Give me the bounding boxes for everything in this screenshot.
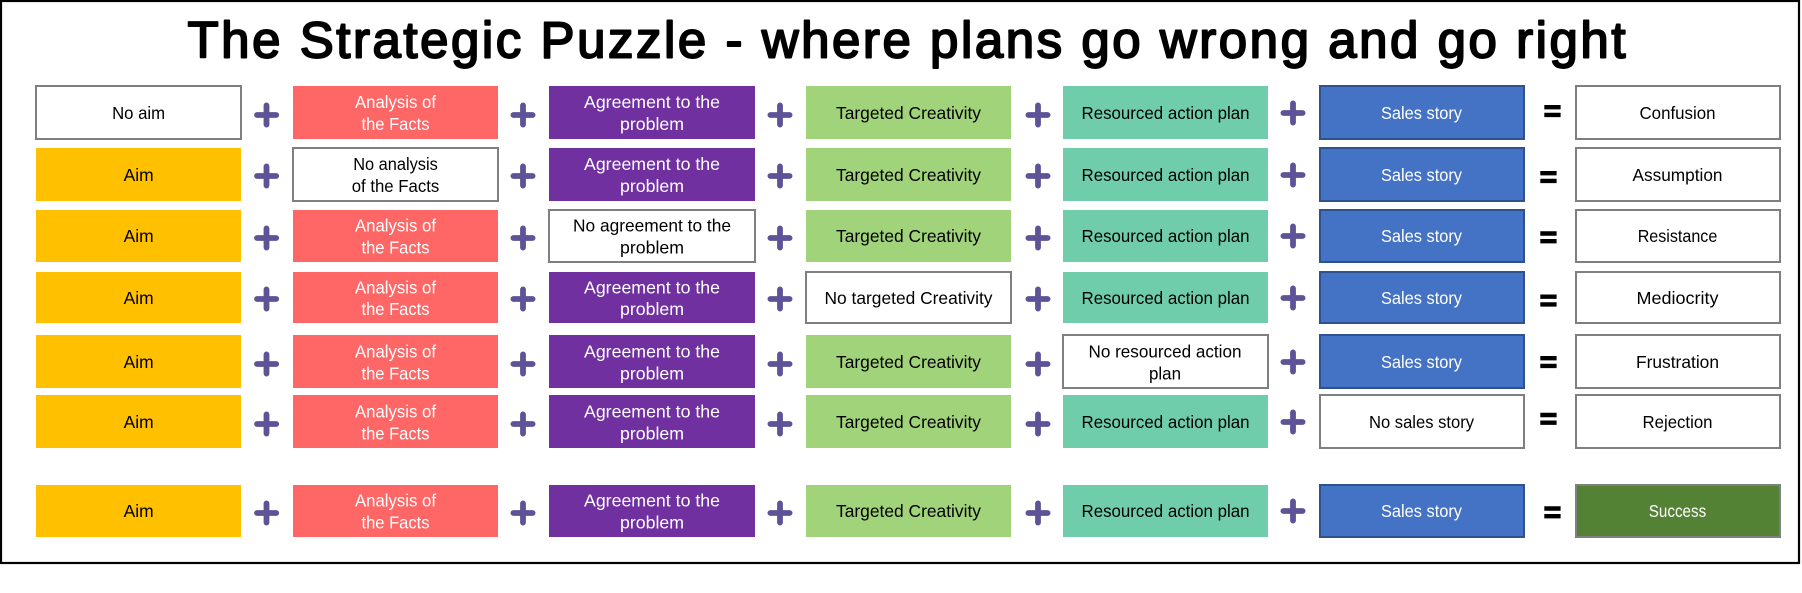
box: analysis of the facts: the Facts [362,423,430,443]
plus [770,354,790,374]
box: aim [36,485,241,537]
box: analysis of the facts: the Facts [362,363,430,383]
box: sales story [1320,272,1524,323]
box: sales story: Sales story [1381,501,1462,521]
box: no targeted creativity [806,272,1011,323]
box: no resourced action plan: No resourced action [1088,341,1242,361]
box: no aim [36,86,241,139]
plus [513,503,533,523]
box: no analysis of the facts: of the Facts [352,176,440,196]
box: no agreement to the problem [549,210,755,262]
plus [770,228,790,248]
box: aim: Aim [124,226,154,246]
plus [257,228,276,248]
plus [770,503,790,523]
plus [257,503,276,523]
box: aim: Aim [124,412,154,432]
plus [1028,166,1048,186]
box: targeted creativity: Targeted Creativity [836,103,981,123]
plus [1283,165,1303,185]
box: resourced action plan [1063,272,1268,323]
equals [1540,356,1557,368]
box: analysis of the facts: Analysis of [355,277,436,297]
box: resourced action plan [1063,395,1268,448]
box: analysis of the facts: Analysis of [355,92,436,112]
box: analysis of the facts: the Facts [362,299,430,319]
box: agreement to the problem: problem [620,363,684,383]
plus [770,105,790,125]
equals [1544,506,1561,518]
box: aim: Aim [124,501,154,521]
box: no resourced action plan [1063,335,1268,388]
equals [1540,231,1557,243]
box: targeted creativity: Targeted Creativity [836,501,981,521]
title: The Strategic Puzzle - where plans go wrong and go right [188,12,1626,68]
box: resourced action plan: Resourced action plan [1082,103,1250,123]
box: sales story [1320,86,1524,139]
box: no sales story: No sales story [1369,412,1474,432]
plus [1028,414,1048,434]
plus [1283,226,1303,246]
box: aim [36,148,241,201]
plus [1028,354,1048,374]
box: agreement to the problem [549,86,755,139]
plus [770,166,790,186]
box: aim: Aim [124,352,154,372]
box: agreement to the problem [549,485,755,537]
box: sales story: Sales story [1381,352,1462,372]
box: frustration [1576,335,1780,388]
box: agreement to the problem: Agreement to the [584,92,720,112]
box: agreement to the problem: problem [620,176,684,196]
box: analysis of the facts: Analysis of [355,341,436,361]
box: targeted creativity [806,210,1011,262]
box: rejection: Rejection [1642,412,1712,432]
box: resourced action plan: Resourced action plan [1082,226,1250,246]
row 7: all elements = success [36,485,1780,537]
equals [1544,105,1561,117]
box: aim [36,272,241,323]
plus [1283,288,1303,308]
box: analysis of the facts: Analysis of [355,490,436,510]
box: sales story [1320,210,1524,262]
plus [1283,103,1303,123]
plus [257,414,276,434]
plus [257,354,276,374]
plus [1283,501,1303,521]
box: sales story: Sales story [1381,165,1462,185]
plus [513,354,533,374]
box: no targeted creativity: No targeted Creativity [824,288,993,308]
box: agreement to the problem: Agreement to the [584,277,720,297]
box: no analysis of the facts [293,148,498,201]
box: assumption [1576,148,1780,201]
plus [513,414,533,434]
box: aim: Aim [124,288,154,308]
box: resourced action plan [1063,210,1268,262]
equals [1540,413,1557,425]
box: no agreement to the problem: problem [620,238,684,258]
box: aim: Aim [124,165,154,185]
plus [257,105,276,125]
box: frustration: Frustration [1636,352,1719,372]
box: agreement to the problem: Agreement to the [584,341,720,361]
plus [513,105,533,125]
box: analysis of the facts: the Facts [362,114,430,134]
box: targeted creativity: Targeted Creativity [836,352,981,372]
box: resourced action plan: Resourced action plan [1082,501,1250,521]
box: sales story: Sales story [1381,103,1462,123]
box: resourced action plan [1063,86,1268,139]
plus [513,289,533,309]
box: targeted creativity: Targeted Creativity [836,412,981,432]
box: analysis of the facts: the Facts [362,512,430,532]
box: success: Success [1649,501,1706,521]
box: agreement to the problem: problem [620,299,684,319]
box: agreement to the problem: Agreement to the [584,154,720,174]
plus [1283,412,1303,432]
plus [1028,289,1048,309]
row 1: no aim = confusion [36,86,1780,139]
plus [513,228,533,248]
row 3: no agreement = resistance [36,210,1780,262]
box: targeted creativity: Targeted Creativity [836,165,981,185]
box: no resourced action plan: plan [1149,363,1181,383]
box: agreement to the problem: problem [620,423,684,443]
plus [1028,503,1048,523]
plus [1028,228,1048,248]
box: mediocrity [1576,272,1780,323]
box: targeted creativity [806,395,1011,448]
plus [770,414,790,434]
box: analysis of the facts [293,272,498,323]
plus [257,166,276,186]
row 2: no analysis = assumption [36,148,1780,201]
box: confusion: Confusion [1640,103,1716,123]
box: sales story [1320,148,1524,201]
box: aim [36,210,241,262]
box: success [1576,485,1780,537]
box: agreement to the problem [549,335,755,388]
box: agreement to the problem: problem [620,114,684,134]
row 4: no targeted creativity = mediocrity [36,272,1780,323]
box: agreement to the problem: Agreement to the [584,490,720,510]
box: mediocrity: Mediocrity [1636,288,1719,308]
box: no agreement to the problem: No agreement to the [573,216,731,236]
plus [257,289,276,309]
box: agreement to the problem: Agreement to the [584,401,720,421]
box: analysis of the facts: Analysis of [355,401,436,421]
box: rejection [1576,395,1780,448]
box: targeted creativity [806,148,1011,201]
box: sales story: Sales story [1381,226,1462,246]
box: aim [36,335,241,388]
equals [1540,294,1557,307]
box: no analysis of the facts: No analysis [353,154,438,174]
plus [1028,105,1048,125]
box: no aim: No aim [112,103,165,123]
box: targeted creativity [806,485,1011,537]
box: resourced action plan [1063,148,1268,201]
box: agreement to the problem [549,395,755,448]
box: no sales story [1320,395,1524,448]
box: analysis of the facts [293,395,498,448]
box: analysis of the facts [293,210,498,262]
box: resourced action plan [1063,485,1268,537]
box: analysis of the facts: the Facts [362,238,430,258]
box: agreement to the problem [549,272,755,323]
box: targeted creativity: Targeted Creativity [836,226,981,246]
box: sales story [1320,485,1524,537]
plus [513,166,533,186]
box: resourced action plan: Resourced action plan [1082,288,1250,308]
box: analysis of the facts [293,485,498,537]
box: targeted creativity [806,86,1011,139]
box: agreement to the problem [549,148,755,201]
box: resourced action plan: Resourced action plan [1082,165,1250,185]
box: analysis of the facts [293,86,498,139]
box: sales story: Sales story [1381,288,1462,308]
box: aim [36,395,241,448]
equals [1540,171,1557,183]
plus [770,289,790,309]
box: agreement to the problem: problem [620,512,684,532]
box: analysis of the facts [293,335,498,388]
box: assumption: Assumption [1632,165,1722,185]
box: resistance: Resistance [1638,226,1717,246]
box: sales story [1320,335,1524,388]
box: analysis of the facts: Analysis of [355,216,436,236]
box: resistance [1576,210,1780,262]
box: targeted creativity [806,335,1011,388]
row 6: no sales story = rejection [36,395,1780,448]
box: confusion [1576,86,1780,139]
plus [1283,352,1303,372]
row 5: no resourced action plan = frustration [36,335,1780,388]
box: resourced action plan: Resourced action plan [1082,412,1250,432]
